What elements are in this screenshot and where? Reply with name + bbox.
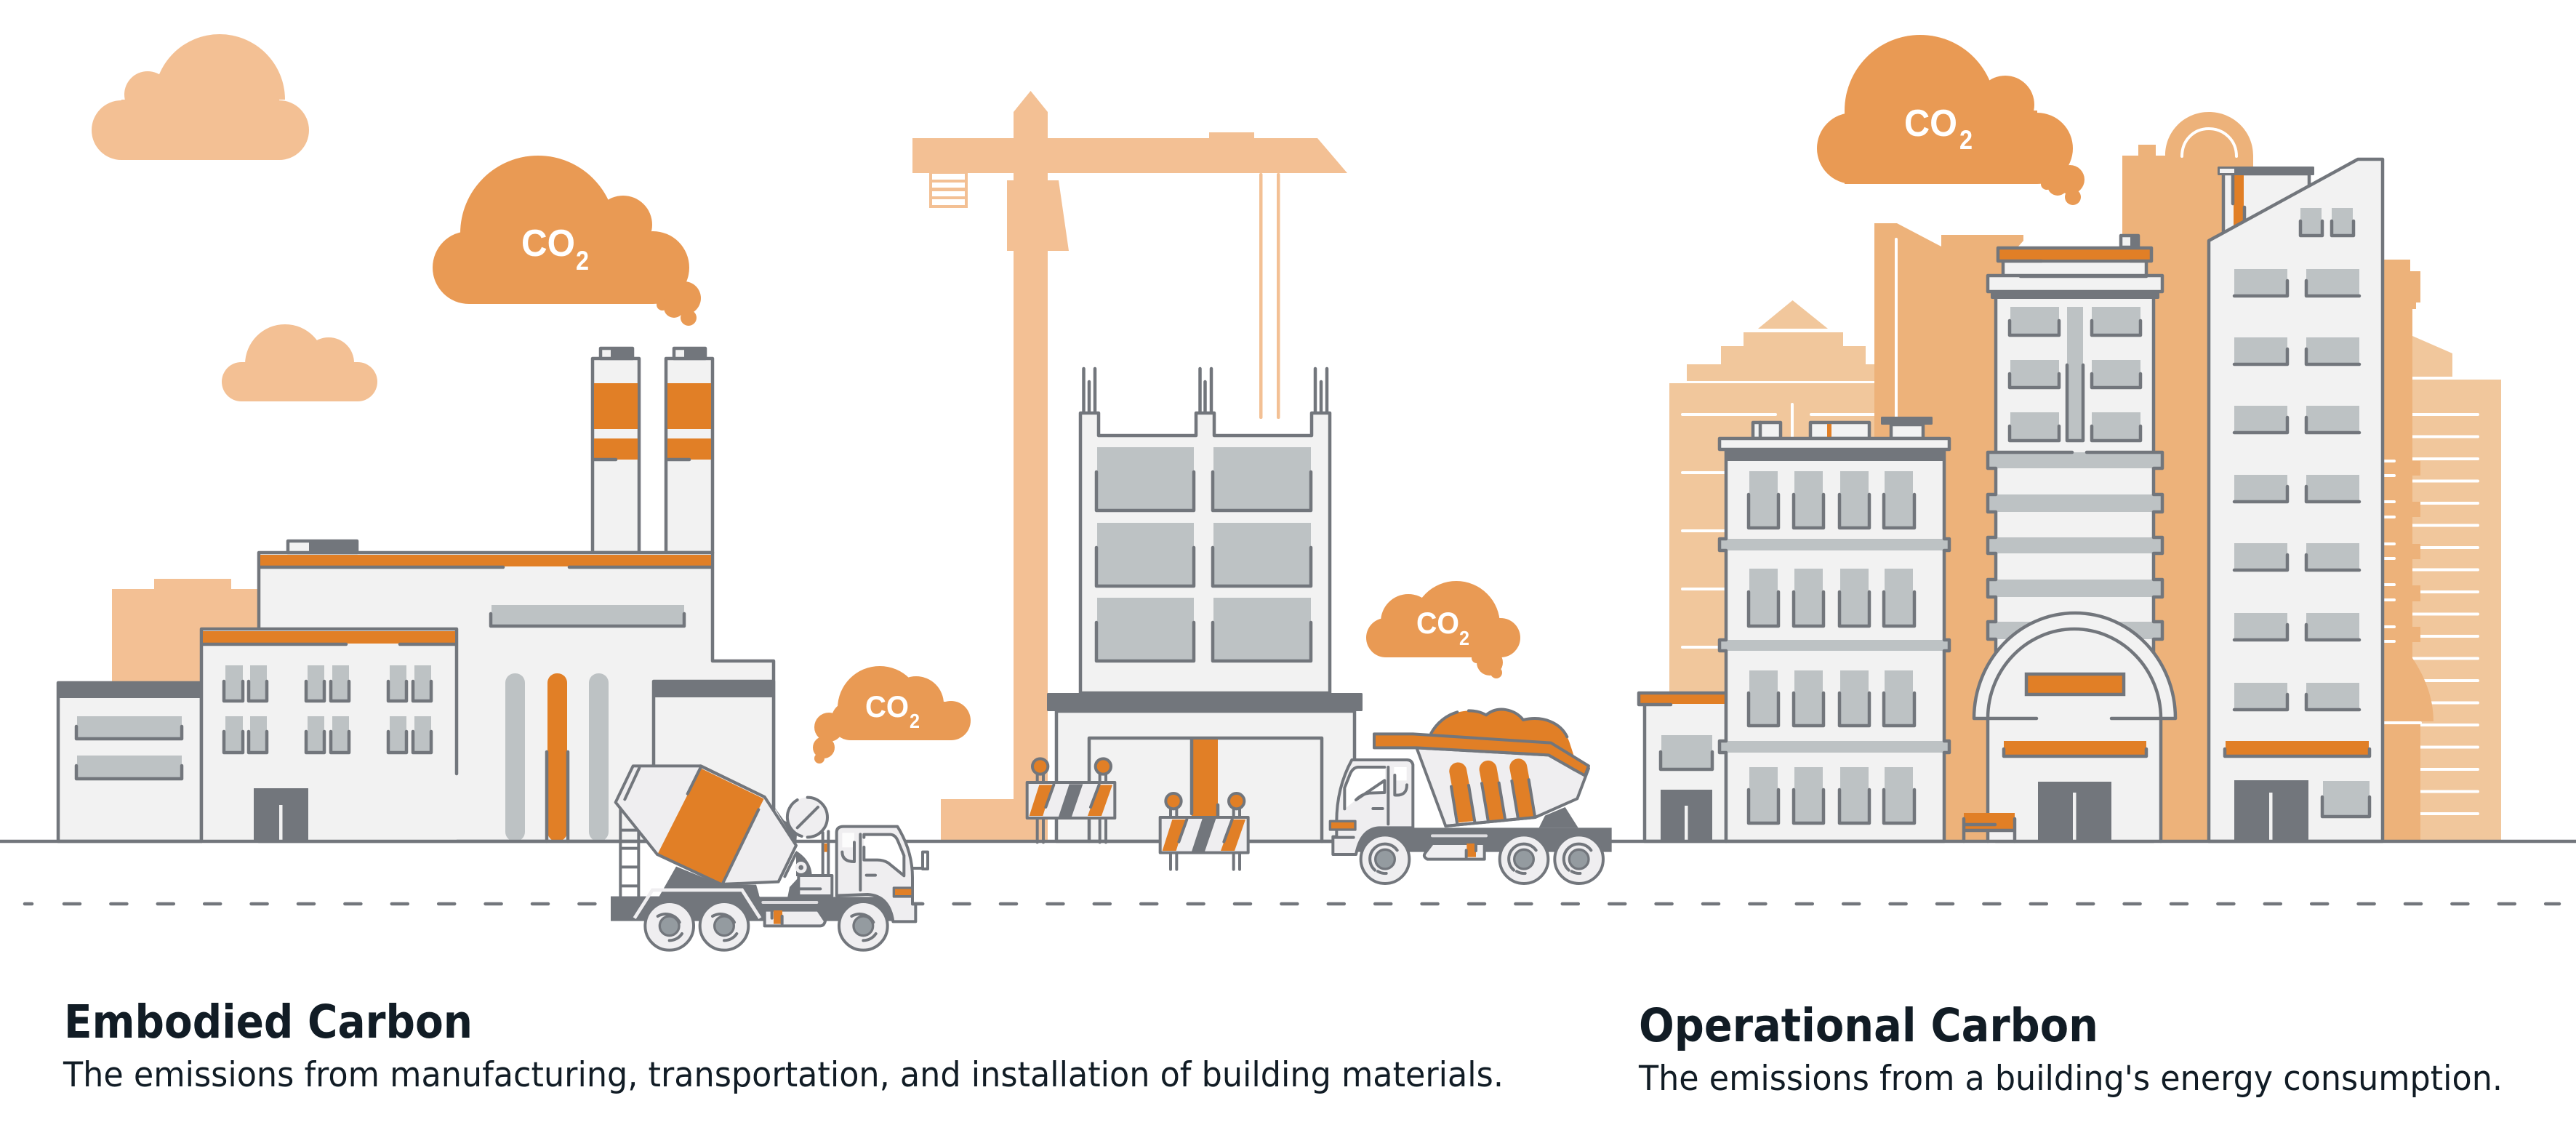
dump truck rear wheels: [1500, 835, 1603, 883]
ground floor: [1047, 693, 1363, 841]
apartment windows: [1749, 471, 1914, 823]
central tower: [1974, 235, 2175, 841]
mixer front wheel: [839, 902, 888, 950]
dump truck hydraulic and chassis: [1355, 807, 1612, 852]
ground line: [0, 840, 2576, 843]
dump truck load: [1431, 710, 1575, 761]
central tower windows: [2010, 307, 2140, 441]
cloud: CO2 above factory: [433, 156, 701, 326]
cloud: small pale cloud left: [222, 324, 377, 401]
factory pipes: [505, 673, 609, 841]
mixer chassis: [611, 851, 893, 921]
tall building windows: [2234, 208, 2359, 710]
medium tower with angled roof: [1874, 223, 2023, 841]
central tower bands: [1988, 452, 2162, 639]
central tower arched entrance: [1974, 613, 2175, 841]
cloud: CO2 above factory: 2: [576, 246, 589, 276]
cloud: CO2 beside concrete mixer: 2: [910, 710, 920, 732]
central tower roof: [1988, 235, 2162, 841]
text: operational carbon description: The emissions from a building's energy consumption.: [1638, 1059, 2503, 1099]
factory chimney left: [593, 348, 639, 553]
cloud: large pale cloud top left: [92, 34, 309, 160]
dump truck side toolbox: [1424, 844, 1485, 860]
factory chimney right: [666, 348, 713, 553]
cloud: CO2 beside concrete mixer: [813, 666, 971, 764]
mixer rear wheels: [645, 902, 748, 950]
cloud: CO2 above dump truck: 2: [1459, 627, 1469, 649]
crane counterweight ladder: [929, 173, 968, 208]
road barrier left: [1027, 758, 1115, 842]
factory office block: [201, 629, 457, 841]
rear roof stack: [2218, 167, 2314, 233]
dump truck bed rim: [1374, 734, 1589, 776]
small shop building: [1639, 693, 1726, 841]
apartment block: [1720, 417, 1949, 841]
pale tower right: [2412, 336, 2501, 841]
mixer side toolbox: [765, 910, 825, 926]
mixer water tank: [773, 798, 832, 896]
dashed road centre line: [25, 902, 2559, 905]
apartment floor bands: [1720, 539, 1949, 753]
concrete mixer truck: [611, 766, 928, 950]
factory door: [254, 788, 308, 841]
cloud: CO2 beside concrete mixer: CO: [865, 689, 909, 724]
medium tower with dome: [2122, 112, 2327, 841]
mixer cab: [837, 827, 928, 921]
city foreground buildings: [1639, 159, 2383, 841]
cloud: CO2 above dump truck: [1366, 581, 1520, 678]
cloud: CO2 above factory: CO: [521, 223, 575, 265]
mixer drum: [616, 766, 796, 884]
crane silhouette: [912, 91, 1347, 841]
concrete building under construction: [1047, 369, 1363, 841]
tall slanted building: [2209, 159, 2383, 841]
heading: Operational Carbon: Operational Carbon: [1639, 999, 2098, 1052]
city background silhouettes: [1669, 112, 2501, 841]
text: embodied carbon description: The emissions from manufacturing, transportation, and installation of building materials.: [63, 1055, 1504, 1095]
dump truck bed: [1374, 734, 1589, 826]
medium tower right of tall building: [2378, 260, 2433, 841]
road barrier centre: [1160, 793, 1248, 870]
cloud: CO2 above city: 2: [1959, 125, 1973, 155]
cloud: CO2 above city: CO: [1904, 103, 1957, 145]
rebar on columns: [1083, 369, 1327, 413]
factory complex: [58, 348, 774, 841]
heading: Embodied Carbon: Embodied Carbon: [64, 995, 473, 1049]
upper floors: [1080, 413, 1330, 693]
cloud: CO2 above city: [1817, 35, 2085, 205]
background building behind factory: [112, 579, 259, 683]
dump truck: [1329, 710, 1612, 883]
bench: [1964, 813, 2015, 841]
dump truck front wheel: [1361, 835, 1409, 883]
apartment rooftop boxes: [1753, 417, 1933, 438]
mixer ladder: [620, 807, 638, 897]
pale stepped tower left: [1669, 300, 1874, 841]
cloud: CO2 above dump truck: CO: [1416, 606, 1459, 640]
factory left annex: [58, 683, 201, 841]
factory main hall: [259, 540, 774, 841]
dump truck cab: [1329, 760, 1413, 854]
